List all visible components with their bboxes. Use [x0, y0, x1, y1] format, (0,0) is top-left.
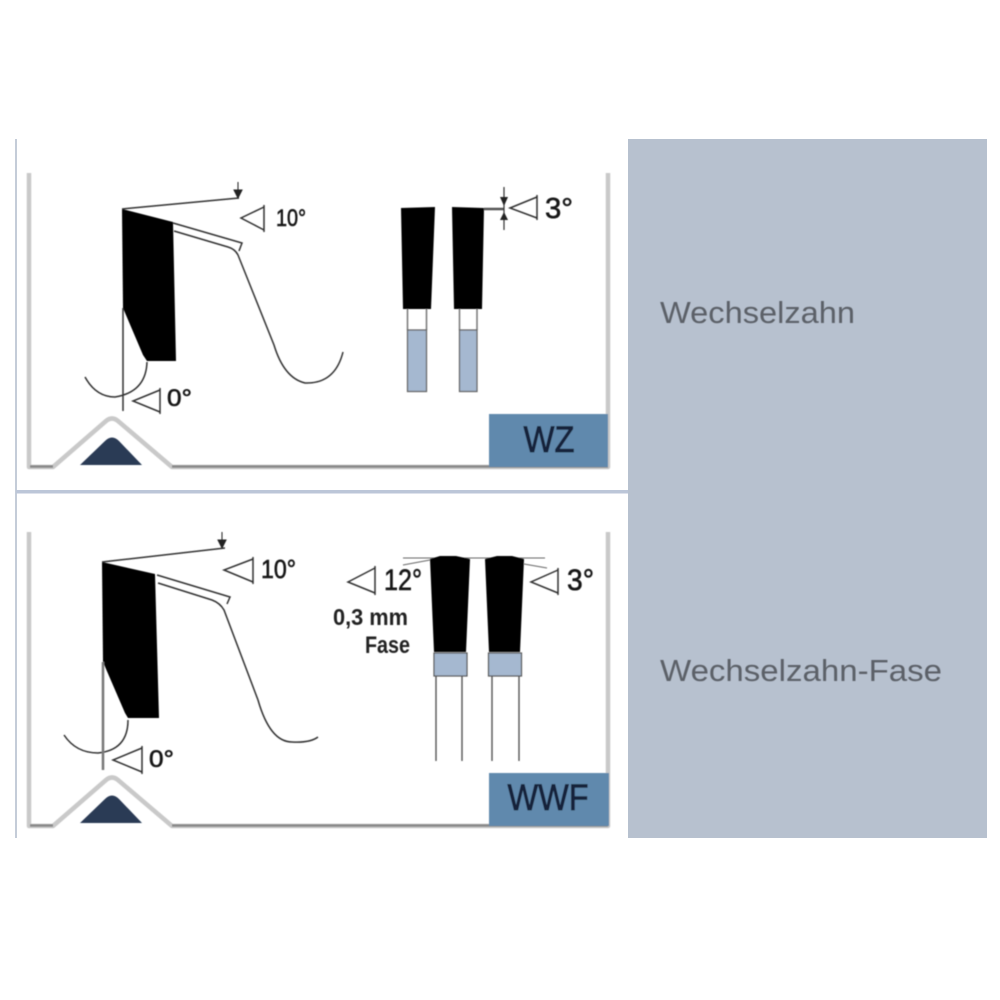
angle label: 10 degrees [224, 554, 296, 584]
side view tooth [122, 209, 176, 361]
angle label: 3 degrees: 3° [567, 564, 594, 597]
label: Wechselzahn: Wechselzahn [660, 295, 855, 330]
side view tooth [102, 562, 159, 718]
angle label: 0 degrees [133, 385, 192, 414]
arrow: top clearance [218, 532, 226, 548]
front view teeth [401, 207, 484, 392]
chamfer label [333, 604, 410, 659]
angle label: 0 degrees: 0° [167, 385, 192, 412]
panel: WZ tooth [29, 173, 608, 467]
chamfer label: 0,3 mm [333, 604, 408, 630]
panel outline with peak [29, 532, 608, 826]
panel: WWF tooth [29, 532, 609, 826]
front view teeth [403, 556, 547, 761]
badge: WWF: WWF [508, 777, 588, 818]
angle label: 3 degrees [484, 187, 573, 230]
badge: WZ: WZ [524, 419, 574, 460]
panel: labels column [628, 139, 987, 838]
badge: WWF [489, 773, 609, 826]
angle label: 0 degrees [113, 746, 174, 774]
angle label: 10 degrees: 10° [276, 205, 306, 232]
angle label: 12 degrees: 12° [384, 564, 422, 597]
panel frame [15, 139, 628, 838]
panel outline with peak [29, 173, 608, 467]
badge: WZ [489, 414, 608, 467]
angle label: 10 degrees: 10° [261, 554, 296, 584]
icon: dark triangle [80, 438, 142, 465]
chamfer label: Fase [365, 632, 410, 659]
icon: dark triangle [80, 796, 142, 823]
side view tooth body outline [64, 548, 318, 753]
label: Wechselzahn-Fase: Wechselzahn-Fase [660, 653, 942, 688]
angle label: 0 degrees: 0° [149, 746, 174, 773]
angle label: 3 degrees: 3° [545, 193, 573, 225]
angle label: 12 degrees [348, 564, 422, 597]
side view tooth body outline [85, 198, 343, 411]
vertical reference line [102, 662, 104, 770]
angle label: 10 degrees [241, 205, 306, 232]
angle label: 3 degrees [531, 564, 594, 597]
arrow: top clearance [234, 182, 242, 198]
